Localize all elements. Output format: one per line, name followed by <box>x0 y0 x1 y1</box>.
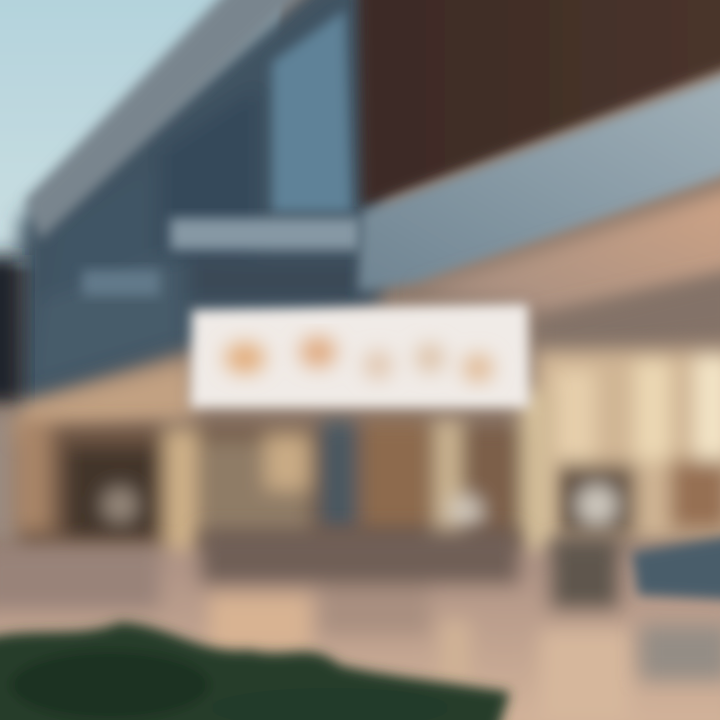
left dark edge <box>0 255 22 405</box>
warm canopy <box>415 185 720 318</box>
lower left edge <box>0 410 20 540</box>
canopy shade <box>535 270 720 360</box>
lower storefront <box>15 390 550 680</box>
building: left label patch <box>82 270 160 296</box>
building: horizontal light band <box>170 218 360 250</box>
left canopy <box>18 360 195 440</box>
building: roof edge strip <box>25 0 312 240</box>
bench: right blue-grey <box>632 535 720 600</box>
bushes <box>0 622 510 720</box>
blue-grey band under overhang <box>358 70 720 292</box>
building: tall window <box>272 10 352 212</box>
building: glass facade <box>15 0 380 410</box>
right windows <box>535 350 720 540</box>
dark wood overhang <box>358 0 720 208</box>
sky <box>0 0 280 270</box>
floor <box>0 530 720 720</box>
bench shadow <box>640 625 720 680</box>
white sign <box>190 304 530 408</box>
sign: orange marks <box>225 337 493 382</box>
